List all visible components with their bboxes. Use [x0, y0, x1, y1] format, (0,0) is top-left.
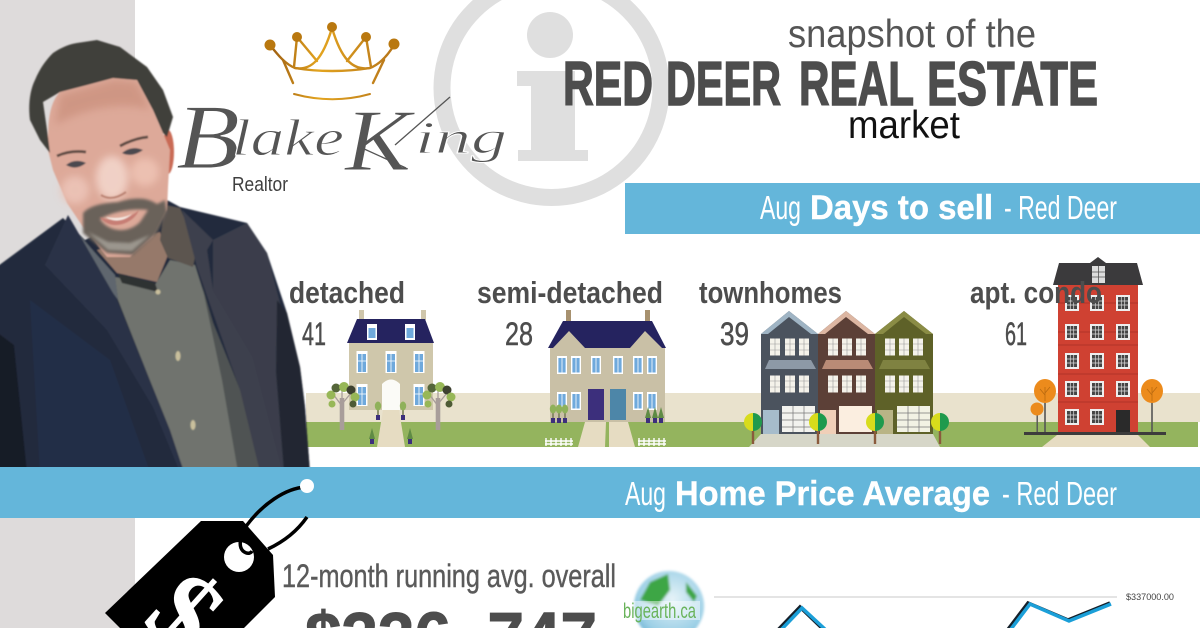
logo: Blake King signature [176, 86, 507, 190]
label: apt. condo 61: 61 [1005, 316, 1027, 352]
logo: Blake King signature: lake [232, 110, 344, 167]
label: semi-detached 28: semi-detached [477, 275, 663, 310]
jacket left shading [0, 330, 27, 472]
face [48, 78, 170, 257]
text: Realtor: Realtor [232, 174, 288, 196]
banner: days to sell [625, 183, 1200, 234]
logo: Blake King signature: B [176, 86, 240, 188]
icon: info watermark [434, 0, 670, 206]
banner: home price average [0, 467, 1200, 518]
collar band [118, 274, 158, 292]
title: snapshot of the [788, 13, 1036, 56]
house: townhomes [744, 311, 949, 447]
collar right [160, 205, 197, 267]
banner: days to sell: Days to sell [810, 189, 993, 227]
logo: Blake King signature: ing [415, 112, 507, 163]
photo: realtor portrait [0, 40, 310, 472]
logo: bigearth.ca globe: bigearth.ca [623, 600, 696, 623]
label: semi-detached 28: 28 [505, 316, 533, 352]
label: townhomes 39: townhomes [699, 275, 842, 310]
logo: bigearth.ca globe [622, 571, 704, 628]
banner: home price average: Home Price Average [675, 475, 990, 513]
label: apt. condo 61 [970, 275, 1102, 352]
eyes [66, 148, 143, 168]
hair [29, 40, 173, 153]
forehead shade [55, 80, 150, 125]
chart: home price line [714, 592, 1174, 628]
mouth [100, 210, 139, 225]
chart: home price line: $337000.00 [1126, 592, 1174, 602]
label: townhomes 39 [699, 275, 842, 352]
label: semi-detached 28 [477, 275, 663, 352]
shirt buttons [156, 290, 196, 430]
label: detached 41: detached [289, 275, 405, 310]
jacket [0, 200, 310, 472]
house: semi-detached [545, 310, 666, 447]
beard grey tips [88, 232, 150, 251]
background grey panels [0, 0, 135, 628]
beard [83, 198, 167, 255]
logo: crown [264, 22, 400, 99]
label: apt. condo 61: apt. condo [970, 275, 1102, 310]
neck [97, 232, 168, 282]
ground strip [306, 393, 1200, 447]
title: market [848, 104, 960, 147]
ear [162, 130, 174, 174]
jacket right body [213, 223, 300, 472]
icon: price tag [105, 479, 314, 628]
banner: home price average: Aug [625, 475, 666, 512]
cheeks highlight [61, 156, 159, 204]
jacket right sleeve [276, 300, 310, 472]
nose [101, 192, 126, 198]
title [563, 13, 1098, 147]
label: detached 41 [289, 275, 405, 352]
title: REAL [799, 50, 914, 119]
label: detached 41: 41 [302, 316, 326, 352]
lapel left [45, 215, 184, 472]
text: 12-month running average: 12-month running avg. overall [282, 558, 616, 594]
title: ESTATE [927, 50, 1098, 119]
banner: days to sell: Aug [760, 189, 801, 226]
label: townhomes 39: 39 [720, 316, 749, 352]
logo: Blake King signature: K [343, 93, 416, 190]
building: apartment condo [1024, 257, 1166, 447]
shirt [115, 260, 260, 472]
lapel right [182, 210, 283, 472]
title: RED [563, 50, 653, 119]
title: DEER [666, 50, 781, 119]
brows [57, 137, 148, 156]
house: detached [326, 310, 456, 447]
collar left [77, 232, 118, 300]
banner: home price average: - Red Deer [1002, 475, 1117, 512]
banner: days to sell: - Red Deer [1004, 189, 1117, 226]
shirt shadow [202, 285, 260, 472]
